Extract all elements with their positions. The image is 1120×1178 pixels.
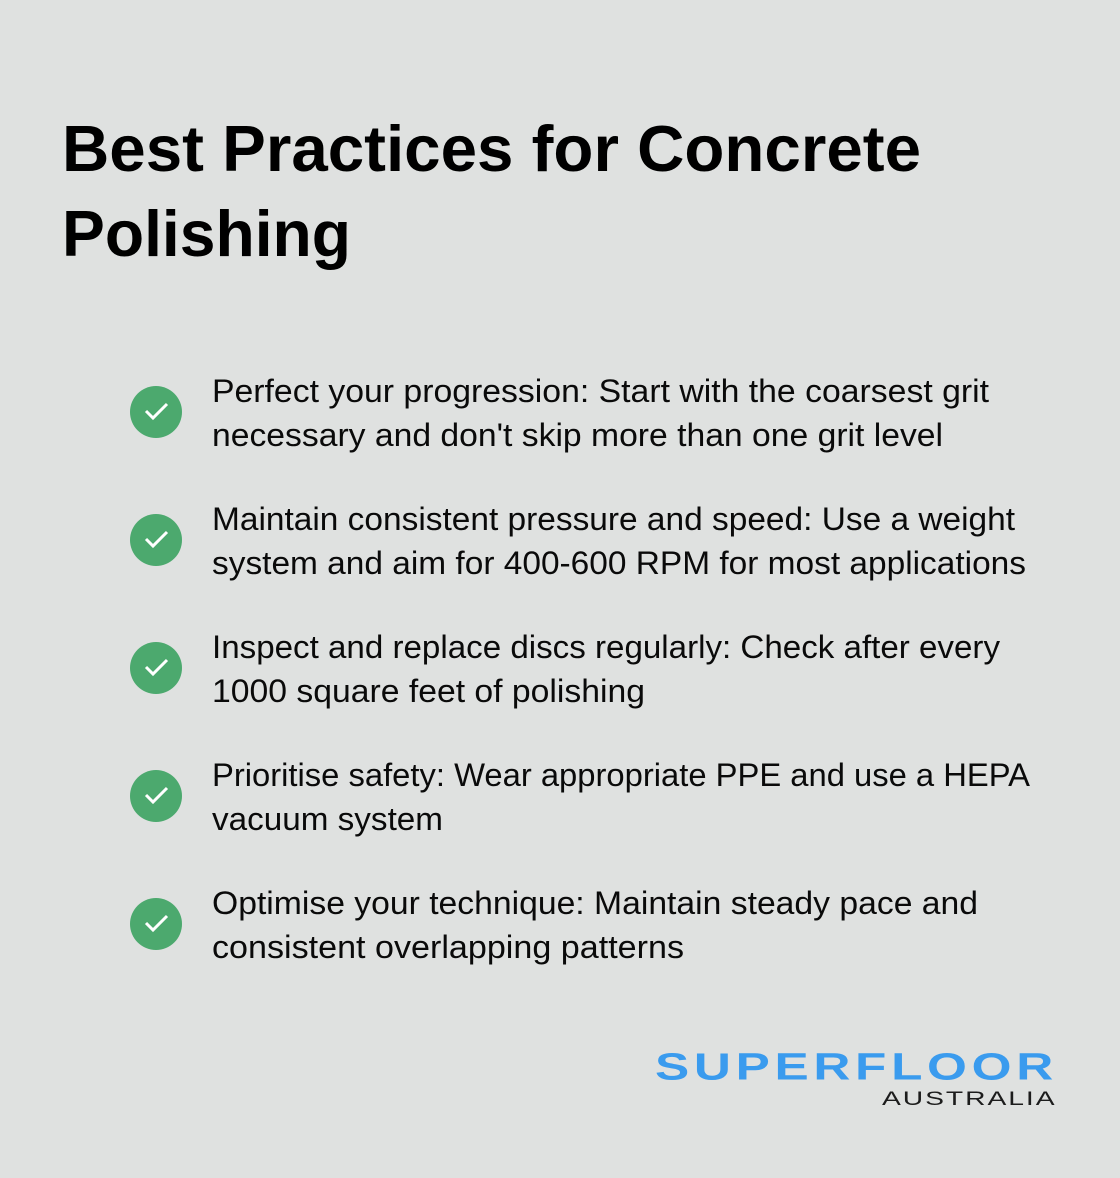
item text: consistent overlapping patterns — [212, 929, 684, 965]
checklist — [130, 373, 1031, 965]
item text — [212, 757, 1031, 837]
icon: check badge — [130, 898, 182, 950]
item: perfect your progression — [130, 373, 989, 453]
item: consistent pressure and speed — [130, 501, 1026, 581]
item: optimise your technique — [130, 885, 978, 965]
item text: 1000 square feet of polishing — [212, 673, 645, 709]
title: Best Practices for Concrete — [62, 112, 921, 185]
item text: system and aim for 400-600 RPM for most applications — [212, 545, 1026, 581]
item text — [212, 373, 989, 453]
item text: Inspect and replace discs regularly: Check after every — [212, 629, 1000, 665]
icon: check badge — [130, 770, 182, 822]
item: prioritise safety — [130, 757, 1031, 837]
logo: Superfloor Australia: SUPERFLOOR — [655, 1045, 1053, 1088]
logo: Superfloor Australia: AUSTRALIA — [882, 1088, 1055, 1110]
icon: check badge — [130, 642, 182, 694]
item text: Perfect your progression: Start with the coarsest grit — [212, 373, 989, 409]
icon: check badge — [130, 386, 182, 438]
title — [62, 112, 921, 270]
item text: Optimise your technique: Maintain steady pace and — [212, 885, 978, 921]
icon: check badge — [130, 514, 182, 566]
item text — [212, 885, 978, 965]
item text: necessary and don't skip more than one grit level — [212, 417, 943, 453]
item: inspect and replace discs — [130, 629, 1000, 709]
title: Polishing — [62, 197, 351, 270]
item text — [212, 501, 1026, 581]
item text — [212, 629, 1000, 709]
item text: Prioritise safety: Wear appropriate PPE and use a HEPA — [212, 757, 1031, 793]
logo: Superfloor Australia — [655, 1045, 1055, 1110]
item text: vacuum system — [212, 801, 443, 837]
item text: Maintain consistent pressure and speed: Use a weight — [212, 501, 1015, 537]
